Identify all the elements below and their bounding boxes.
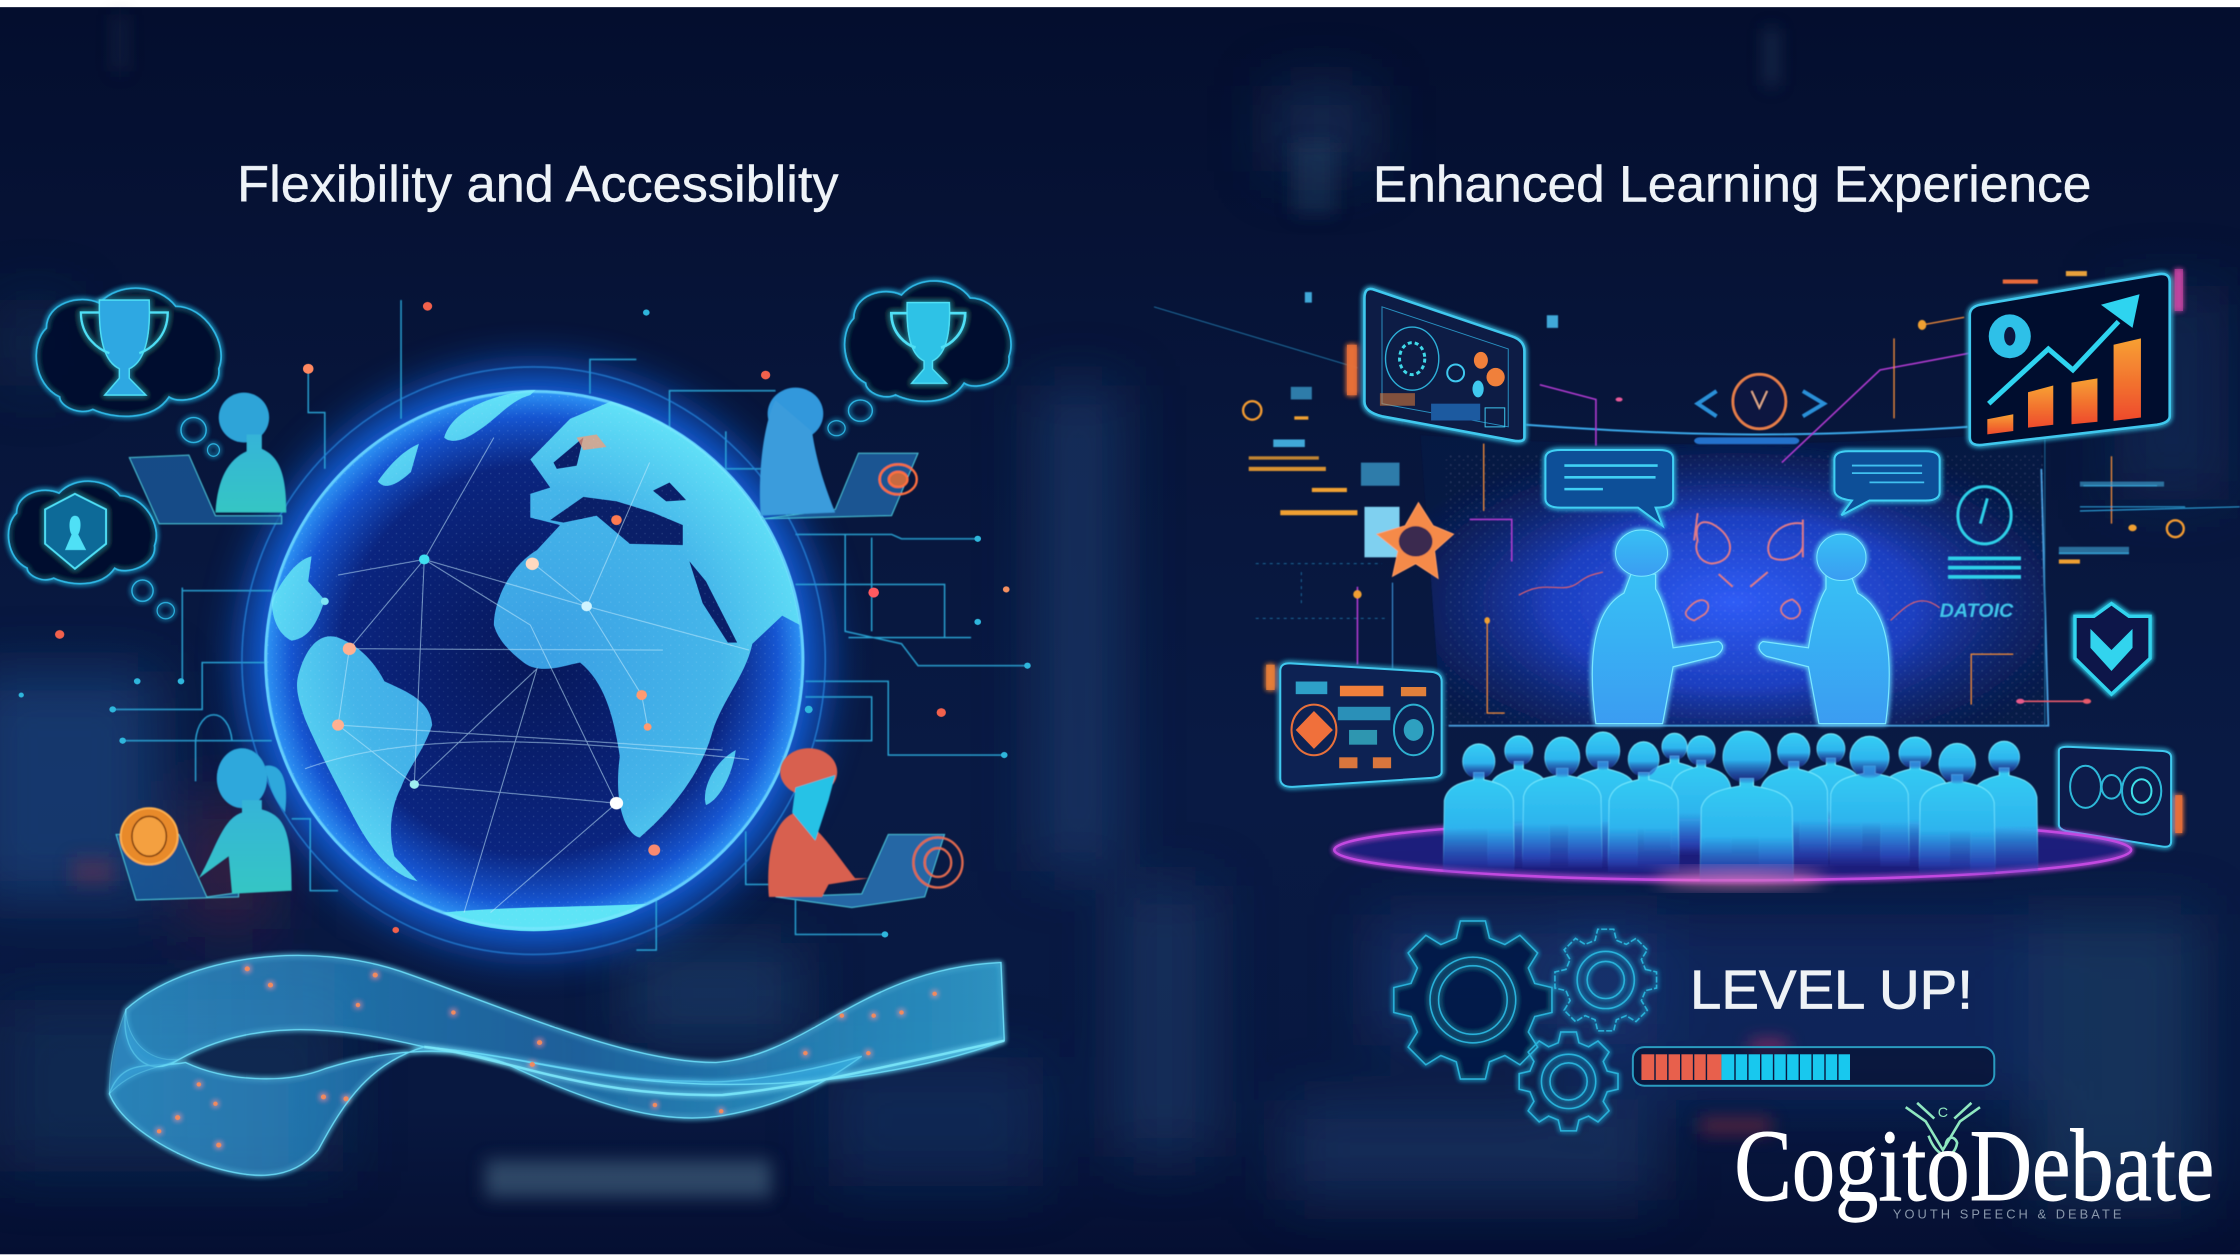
seas: [550, 438, 737, 642]
panel: enhanced learning illustration: [1154, 269, 2240, 886]
clock and chevrons top centre: [1698, 374, 1824, 429]
icon: star: [1364, 503, 1454, 578]
network nodes: [321, 515, 652, 809]
globe halo: [244, 370, 824, 950]
heading: enhanced learning experience: Enhanced Learning Experience: [1373, 154, 2091, 212]
audience: [1443, 731, 2038, 884]
panel: growth chart top right: [1970, 269, 2183, 445]
logo: CogitoDebate: YOUTH SPEECH & DEBATE: [1893, 1207, 2124, 1222]
stage ring: [1334, 820, 2131, 880]
caption text on screen: DATOIC: [1940, 600, 2014, 621]
panel: flexibility illustration: [8, 281, 1031, 1175]
panel: game dashboard top left: [1347, 289, 1524, 441]
icon: large gear: [1394, 921, 1552, 1079]
heading: flexibility and accessiblity: Flexibility and Accessiblity: [237, 154, 839, 212]
icon: clock and text lines: [1948, 487, 2021, 579]
student top left: [129, 392, 286, 524]
icon: lower gear: [1519, 1032, 1618, 1131]
globe: [264, 389, 812, 933]
central screen: [1154, 307, 2048, 726]
icon: coin: [121, 808, 178, 864]
logo emblem: C: [1938, 1105, 1948, 1121]
stage ring highlight: [1654, 871, 1826, 886]
student bottom right: [768, 748, 962, 908]
icon: upper gear: [1555, 929, 1657, 1031]
level up label: LEVEL UP!: [1690, 960, 1973, 1021]
icon: shield: [45, 494, 106, 569]
student top right: [760, 388, 918, 519]
panel: dashboard bottom left: [1266, 663, 1442, 787]
thought cloud with shield, left: [8, 481, 174, 619]
ribbon particles: [157, 966, 937, 1148]
connector lines and small marks: [1243, 271, 2240, 713]
panel: dashboard bottom right: [2059, 747, 2182, 847]
icon: trophy: [81, 300, 168, 395]
data dots: [19, 302, 1031, 938]
speech bubble left: [1545, 450, 1673, 526]
speech bubble right: [1834, 451, 1940, 515]
bars: [1987, 338, 2141, 434]
icon: shield right: [2075, 604, 2150, 694]
continents: [272, 389, 812, 933]
icon: trophy: [891, 302, 965, 383]
progress segments: cyan: [1721, 1054, 1850, 1080]
icon: orange ring: [880, 464, 917, 494]
ribbon: [109, 955, 1004, 1175]
thought cloud with trophy, top right: [828, 281, 1011, 436]
gears: [1394, 921, 1657, 1131]
logo emblem: [1906, 1103, 1980, 1155]
network lines: [305, 438, 749, 912]
crowd with stage ring: [1334, 731, 2131, 886]
speaker left: [1592, 530, 1723, 724]
student bottom left: [116, 748, 292, 900]
circuit lines: [113, 300, 1027, 954]
icon: target: [913, 838, 962, 888]
progress segments: red: [1641, 1054, 1721, 1080]
speaker right: [1759, 534, 1889, 724]
progress bar: [1633, 1047, 1994, 1086]
thought cloud with trophy, top left: [36, 288, 221, 456]
